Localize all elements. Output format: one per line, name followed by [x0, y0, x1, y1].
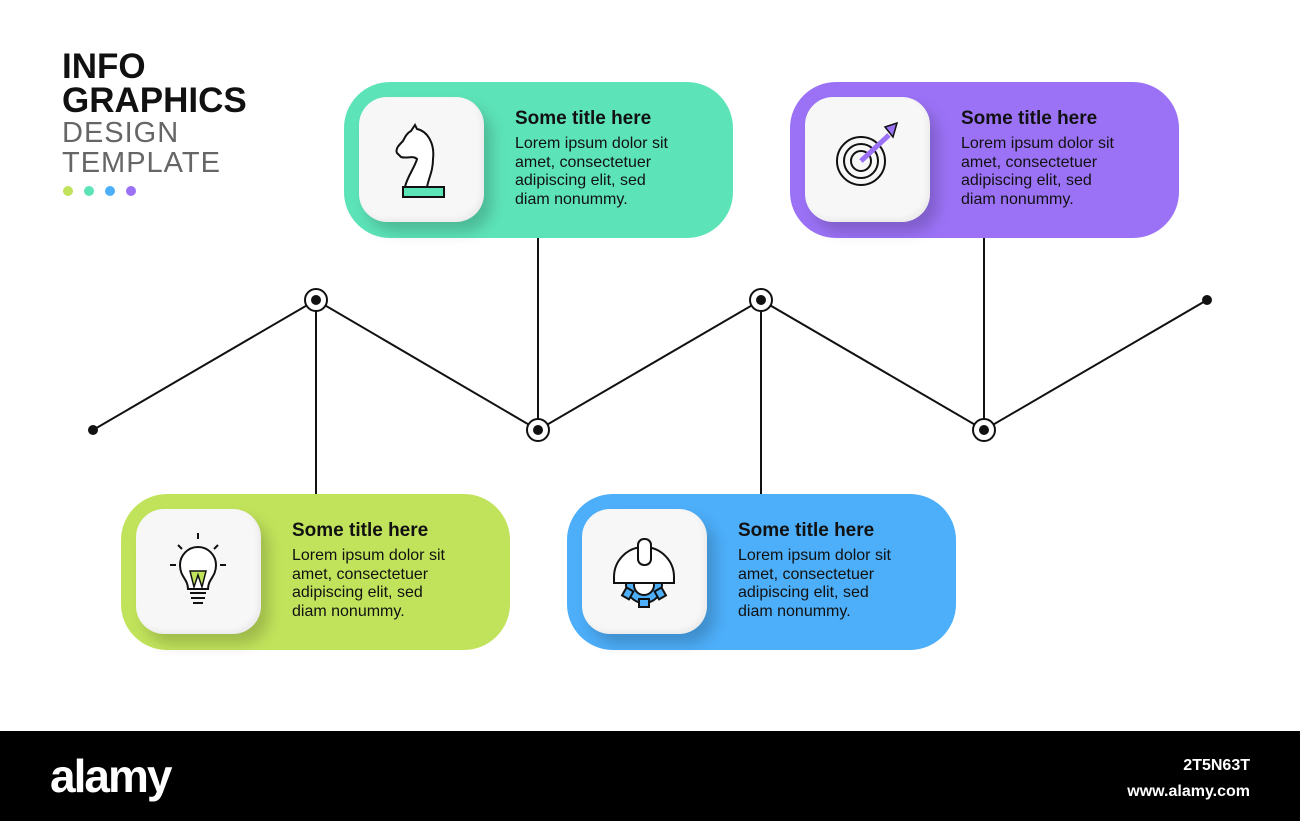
panel: blue: diam nonummy.: [738, 602, 851, 620]
panel: green: [344, 82, 733, 238]
panel: blue: adipiscing elit, sed: [738, 584, 869, 601]
title: [62, 47, 247, 179]
icon: chess knight: [359, 97, 484, 222]
panel: purple: amet, consectetuer: [961, 154, 1097, 170]
panel: blue: Lorem ipsum dolor sit: [738, 547, 891, 564]
panel: purple: [790, 82, 1179, 238]
panel: lime: [121, 494, 510, 650]
panel: lime: adipiscing elit, sed: [292, 584, 423, 601]
title: GRAPHICS: [62, 81, 247, 120]
panel: lime: Lorem ipsum dolor sit: [292, 547, 445, 564]
panel: lime: amet, consectetuer: [292, 566, 428, 582]
panel: purple: Some title here: [961, 108, 1097, 129]
panel: green: adipiscing elit, sed: [515, 172, 646, 189]
icon: target: [805, 97, 930, 222]
title: INFO: [62, 47, 146, 86]
icon: helmet gear: [582, 509, 707, 634]
panel: green: amet, consectetuer: [515, 154, 651, 170]
footer bar: www.alamy.com: [1127, 783, 1250, 800]
footer bar: [0, 731, 1300, 821]
panel: green: diam nonummy.: [515, 190, 628, 208]
color dots: [63, 186, 136, 196]
panel: purple: diam nonummy.: [961, 190, 1074, 208]
panel: purple: adipiscing elit, sed: [961, 172, 1092, 189]
title: TEMPLATE: [62, 147, 221, 179]
panel: purple: Lorem ipsum dolor sit: [961, 135, 1114, 152]
title: DESIGN: [62, 117, 179, 149]
panel: blue: [567, 494, 956, 650]
panel: blue: amet, consectetuer: [738, 566, 874, 582]
icon: bulb: [136, 509, 261, 634]
panel: blue: Some title here: [738, 520, 874, 541]
panel: green: Lorem ipsum dolor sit: [515, 135, 668, 152]
panel: green: Some title here: [515, 108, 651, 129]
panel: lime: diam nonummy.: [292, 602, 405, 620]
panel: lime: Some title here: [292, 520, 428, 541]
footer bar: 2T5N63T: [1183, 757, 1250, 774]
footer bar: alamy: [50, 750, 170, 802]
